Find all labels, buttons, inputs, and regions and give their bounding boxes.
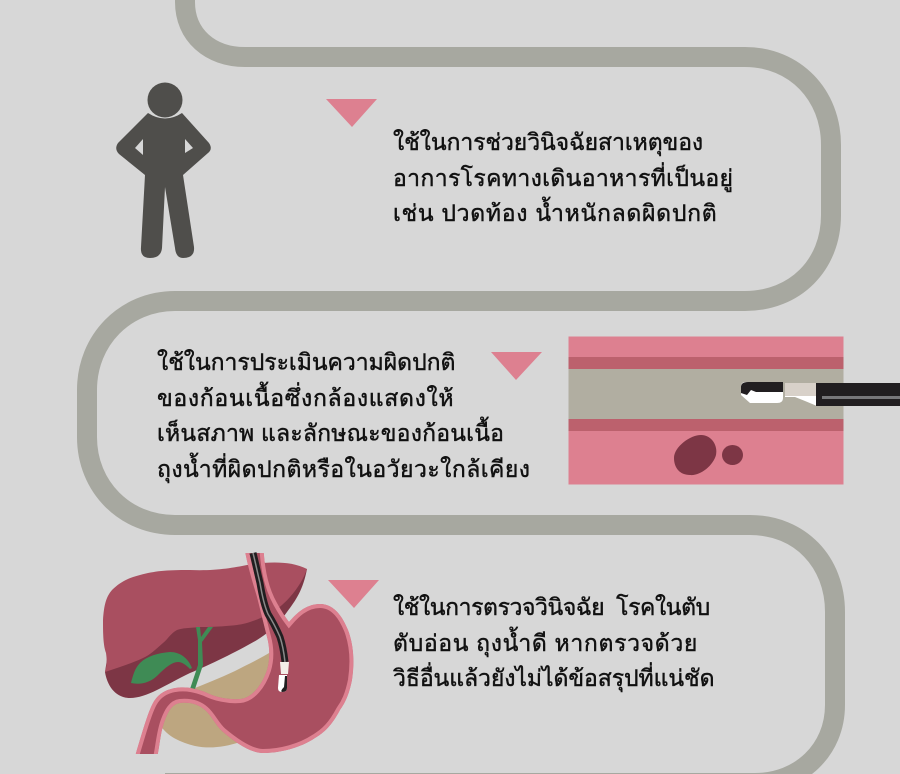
marker triangle 2	[491, 352, 542, 380]
lesion large	[674, 435, 716, 475]
lesion small	[722, 445, 743, 465]
text block 3: ตับอ่อน ถุงน้ำดี หากตรวจด้วย	[393, 630, 698, 656]
text block 1: อาการโรคทางเดินอาหารที่เป็นอยู่	[393, 164, 733, 190]
text block 2: เห็นสภาพ และลักษณะของก้อนเนื้อ	[157, 420, 504, 446]
text block 2: ของก้อนเนื้อซึ่งกล้องแสดงให้	[157, 384, 454, 410]
text block 3: ใช้ในการตรวจวินิจฉัย โรคในตับ	[393, 594, 710, 620]
text block 1	[393, 129, 733, 226]
text block 2	[157, 349, 530, 484]
icon: standing person	[116, 82, 211, 258]
stomach	[136, 553, 354, 754]
endoscope tip	[741, 382, 900, 406]
text block 1: เช่น ปวดท้อง น้ำหนักลดผิดปกติ	[393, 200, 717, 226]
pancreas	[160, 651, 300, 747]
text block 2: ถุงน้ำที่ผิดปกติหรือในอวัยวะใกล้เคียง	[157, 456, 530, 482]
text block 2: ใช้ในการประเมินความผิดปกติ	[157, 349, 455, 375]
text block 1: ใช้ในการช่วยวินิจฉัยสาเหตุของ	[393, 129, 703, 155]
liver	[103, 562, 307, 672]
illustration: liver, stomach and endoscope	[103, 552, 354, 754]
endoscope	[253, 553, 285, 662]
liver underside	[105, 569, 307, 698]
bile duct	[190, 627, 213, 689]
marker triangle 1	[326, 99, 377, 127]
marker triangle 3	[328, 580, 379, 608]
text block 3: วิธีอื่นแล้วยังไม่ได้ข้อสรุปที่แน่ชัด	[393, 665, 714, 691]
endoscope tip	[278, 662, 289, 692]
gallbladder	[131, 652, 192, 684]
illustration: endoscope in intestine	[568, 336, 900, 484]
text block 3	[393, 594, 714, 692]
